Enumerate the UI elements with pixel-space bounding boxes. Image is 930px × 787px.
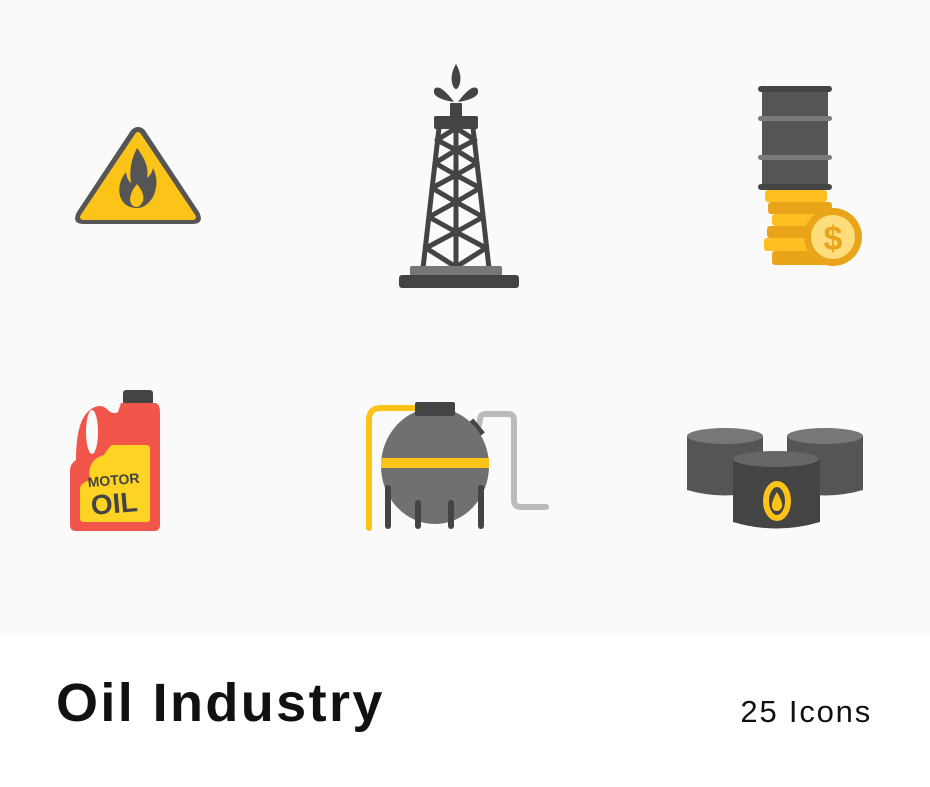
icon count: 25 Icons bbox=[740, 694, 872, 729]
icon: oil drums bbox=[687, 428, 863, 528]
icon: storage tank bbox=[369, 402, 546, 528]
icon: oil barrel with coins bbox=[758, 86, 862, 266]
icon: motor oil jug: MOTOR bbox=[87, 470, 140, 490]
icon: oil derrick bbox=[399, 64, 519, 288]
icon: motor oil jug bbox=[70, 390, 160, 531]
icon: motor oil jug: OIL bbox=[90, 486, 139, 521]
title: Oil Industry bbox=[56, 673, 385, 733]
icon: warning fire sign bbox=[75, 127, 201, 224]
icon: oil barrel with coins: $ bbox=[824, 220, 843, 258]
